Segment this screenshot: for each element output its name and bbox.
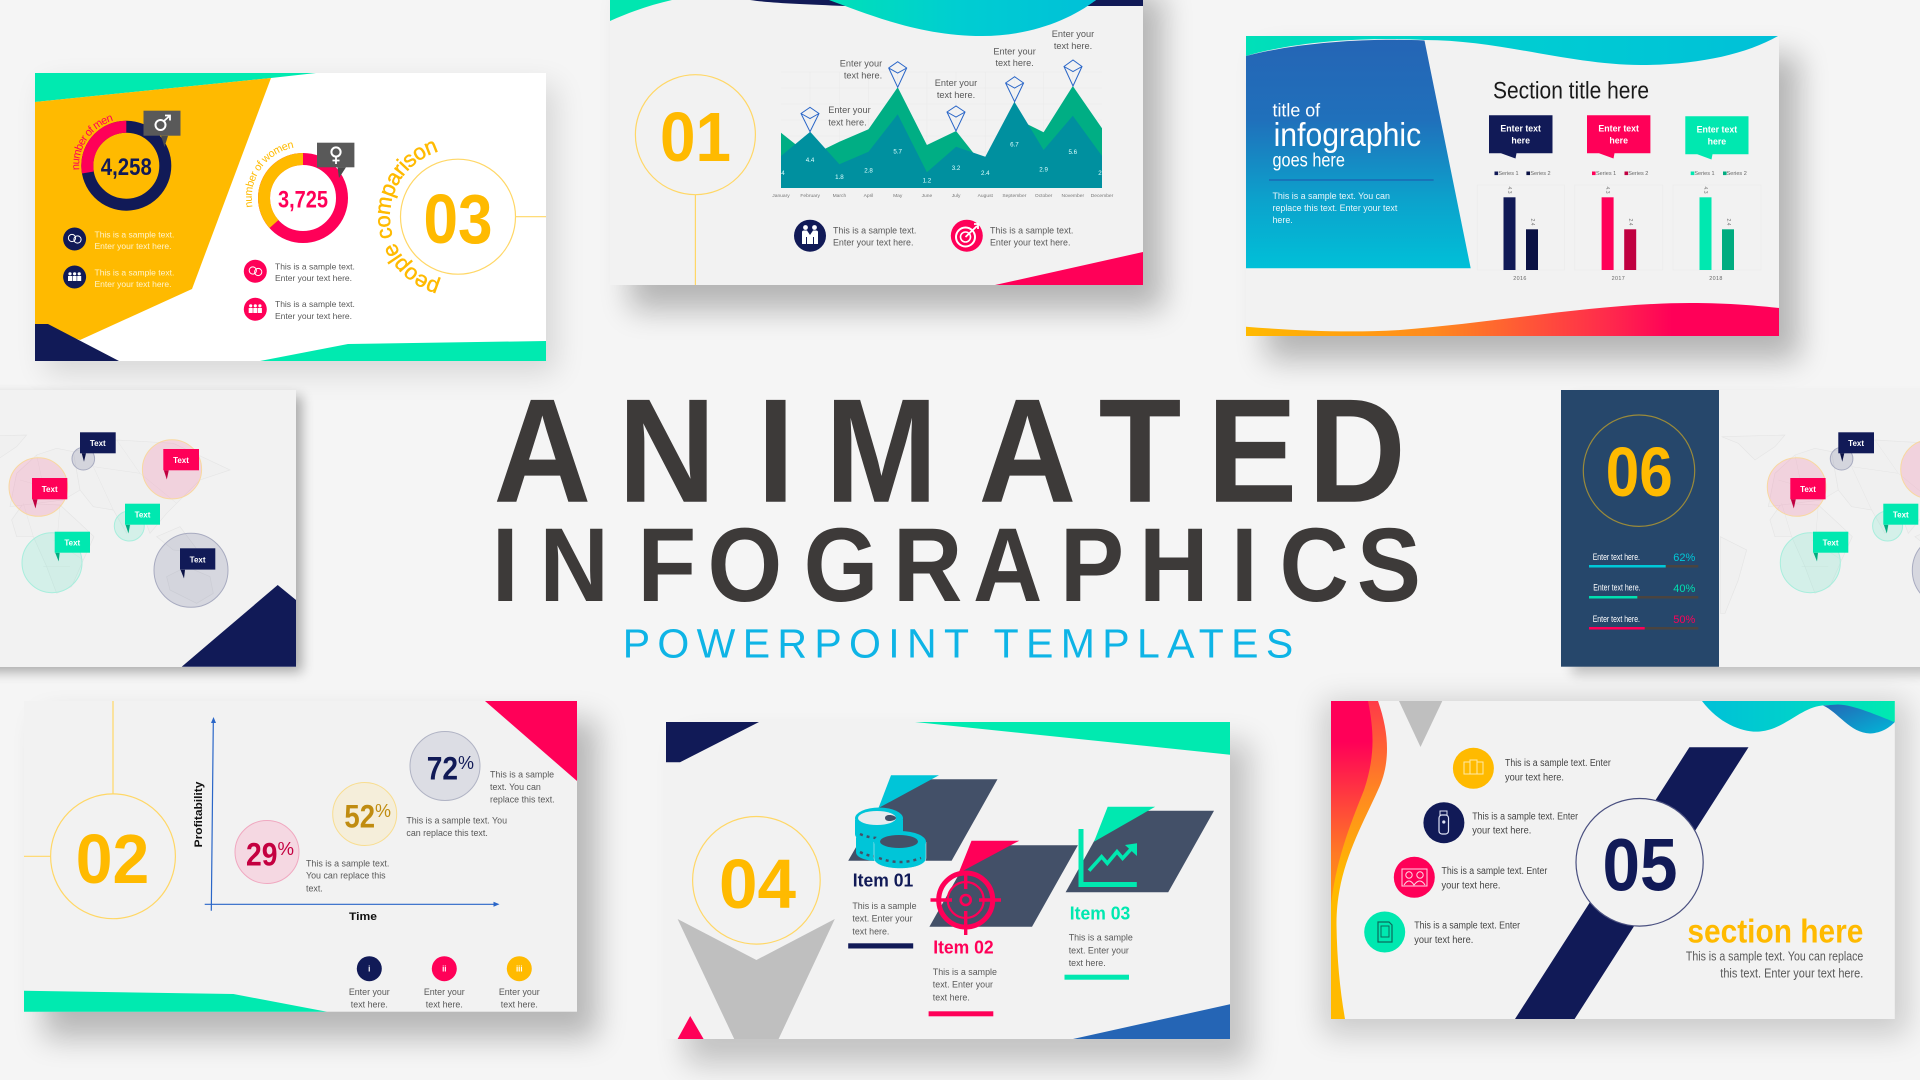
chart: 2016 bars: Series 2: [1530, 171, 1551, 177]
step iii: Enter your: [499, 987, 540, 997]
text: item 02: text. Enter your: [933, 980, 993, 990]
chart: monthly area chart: September: [1002, 193, 1027, 199]
data bubble: 52%: 52: [344, 798, 375, 834]
number badge: 05: [1576, 798, 1703, 926]
icon: pink circle couple: [244, 260, 267, 283]
chart: 2017 bars: Series 2: [1628, 171, 1648, 177]
callout: navy series: here: [1511, 136, 1530, 146]
text: women note one: This is a sample text.: [275, 262, 355, 272]
map bubbles and labels copy: Text: [1893, 510, 1909, 520]
chart: monthly area chart: 1.2: [923, 178, 932, 184]
map bubbles and labels copy: Text: [1800, 485, 1816, 494]
progress row: 40%: [1589, 583, 1698, 598]
text: infographic description: replace this text. Enter your text: [1272, 203, 1398, 213]
chart axes: Profitability: [193, 781, 205, 847]
icon row: green: [1364, 912, 1521, 952]
text: target note: This is a sample text.: [990, 226, 1073, 236]
callout: lower navy: [180, 548, 215, 578]
number badge: 01: 01: [660, 98, 731, 176]
text: 52% note: This is a sample text. You: [406, 815, 507, 825]
text: item 01: text here.: [852, 926, 889, 936]
icon row: pink: your text here.: [1442, 880, 1500, 891]
shape: item 01 parallelogram: [848, 775, 998, 861]
icon row: yellow: your text here.: [1505, 772, 1564, 783]
progress row: 50%: Enter text here.: [1593, 614, 1640, 624]
text: chart annotations: Enter your: [828, 105, 871, 115]
icon: handshake: [794, 220, 826, 252]
callout: navy series: Enter text: [1500, 124, 1541, 134]
text: infographic description: here.: [1272, 215, 1293, 225]
icon row: pink: This is a sample text. Enter: [1442, 866, 1548, 877]
title line: animated: ANIMATED: [493, 369, 1406, 534]
text: item 01: [848, 871, 917, 948]
text: 52% note: can replace this text.: [406, 828, 488, 838]
callout: lower green: [55, 532, 90, 562]
chart axes: Time: [349, 911, 377, 923]
chart: 2017 bars: 2.4: [1627, 219, 1633, 226]
chart: 2017 bars: 4.3: [1604, 187, 1610, 194]
panel: 01 area chart: [610, 0, 1163, 310]
number badge: 03: [400, 159, 546, 274]
text: chart annotations: Enter your: [935, 78, 977, 88]
title line: infographics: INFOGRAPHICS: [492, 507, 1421, 624]
step i: i: [368, 964, 370, 974]
icon: blue circle couple: [63, 228, 86, 250]
chart: monthly area chart: July: [952, 193, 961, 199]
chart: monthly area chart: 5.6: [1068, 149, 1078, 156]
chart: monthly area chart: 5.7: [893, 148, 903, 156]
icon row: yellow: [1453, 748, 1611, 789]
map bubbles and labels: [9, 432, 228, 607]
text: item 03: Item 03: [1070, 903, 1130, 923]
text: chart annotations: text here.: [828, 118, 867, 128]
number badge: 02: [24, 701, 175, 919]
callout: green series: Enter text: [1697, 125, 1737, 135]
panel: 03 people comparison: [35, 73, 564, 382]
callout: top navy: [80, 432, 116, 462]
data bubble: 29%: 29: [246, 837, 278, 873]
text: chart annotations: text here.: [1054, 41, 1092, 51]
icon row: yellow: This is a sample text. Enter: [1505, 758, 1611, 769]
chart: men donut: 4,258: [101, 154, 152, 181]
text: men note two: This is a sample text.: [94, 268, 174, 278]
text: 29% note: text.: [306, 883, 323, 893]
text: 72% note: text. You can: [490, 782, 541, 792]
callout: pink series: here: [1609, 136, 1628, 146]
data bubble: 52%: %: [375, 801, 391, 821]
chart: monthly area chart: August: [978, 193, 994, 199]
callout: navy series: [1489, 115, 1552, 158]
panel: section title bar charts: [1246, 36, 1799, 360]
chart: 2016 bars: 2.4: [1529, 219, 1535, 226]
text: section description: [1686, 949, 1863, 981]
panel: 04 items: [666, 722, 1250, 1064]
chart: monthly area chart: May: [893, 193, 903, 199]
text: chart annotations: Enter your: [993, 46, 1036, 56]
map bubbles and labels copy: [1767, 432, 1920, 607]
chart: men donut: number of men: [73, 116, 113, 170]
chart: monthly area chart: 1.8: [835, 174, 844, 181]
chart: men donut: [73, 116, 172, 211]
progress row: 50%: [1589, 614, 1698, 630]
chart: 2017 bars: 2017: [1612, 276, 1625, 282]
chart: monthly area chart: June: [922, 193, 932, 199]
text: infographic description: This is a sample text. You can: [1272, 191, 1390, 201]
data bubble: 29%: [235, 820, 299, 884]
text: chart annotations: text here.: [937, 90, 975, 100]
chart: 2018 bars: Series 2: [1727, 171, 1747, 177]
progress row: 40%: 40%: [1673, 583, 1696, 595]
text: item 03: text. Enter your: [1069, 945, 1129, 955]
text: item 03: text here.: [1069, 958, 1106, 968]
callout: pink series: [1587, 115, 1650, 158]
number badge: 04: [693, 816, 820, 944]
callout: lower green: Text: [64, 538, 81, 548]
map: world outline: [0, 435, 230, 613]
text: item 01: text. Enter your: [852, 914, 913, 924]
chart: women donut: number of women: [245, 142, 294, 208]
chart: monthly area chart: November: [1062, 193, 1084, 199]
text: chart annotations: Enter your: [1052, 29, 1094, 39]
text: 29% note: You can replace this: [306, 871, 386, 881]
icon: target: [951, 220, 983, 252]
text: chart annotations: text here.: [844, 70, 882, 80]
chart: monthly area chart: December: [1091, 193, 1114, 199]
number badge: 04: 04: [719, 845, 796, 923]
icon: female symbol callout: [317, 143, 354, 178]
step iii: [499, 956, 540, 1009]
data bubble: 29%: %: [278, 839, 294, 859]
icon row: navy: This is a sample text. Enter: [1472, 811, 1579, 822]
panel: world map left: [0, 390, 302, 672]
text: chart annotations: [828, 29, 1094, 128]
chart: monthly area chart: 6.7: [1010, 142, 1019, 148]
icon: crosshair target: [930, 872, 1001, 935]
chart: monthly area chart: March: [833, 193, 846, 199]
step ii: text here.: [426, 999, 463, 1009]
heading: section title: Section title here: [1493, 77, 1649, 104]
callout: left pink: [32, 478, 67, 508]
panel: 05 section: [1323, 701, 1907, 1035]
chart: 2018 bars: 4.3: [1702, 187, 1708, 194]
progress row: 40%: Enter text here.: [1593, 583, 1641, 593]
icon row: navy: [1423, 802, 1579, 843]
data bubble: 72%: 72: [427, 750, 458, 786]
text: item 02: [929, 937, 997, 1016]
step ii: Enter your: [424, 987, 465, 997]
chart: monthly area chart: January: [772, 193, 790, 199]
chart: monthly area chart: 2: [1098, 170, 1102, 177]
chart: monthly area chart: April: [864, 193, 873, 199]
step i: [349, 956, 390, 1009]
map: world outline copy: [1720, 435, 1920, 613]
curved title: people comparison: people comparison: [378, 141, 441, 294]
panel: 06 progress and map: [1561, 390, 1920, 674]
chart: 2018 bars: [1673, 171, 1761, 282]
text: item 01: This is a sample: [852, 901, 917, 911]
text: 72% note: replace this text.: [490, 794, 555, 804]
progress row: 62%: [1589, 552, 1698, 568]
map bubbles and labels copy: Text: [1823, 538, 1839, 548]
text: handshake note: Enter your text here.: [833, 238, 913, 248]
text: handshake note: This is a sample text.: [833, 226, 916, 236]
callout: pink series: Enter text: [1598, 124, 1639, 134]
chart: 2016 bars: 4.3: [1506, 187, 1512, 194]
step i: text here.: [351, 999, 388, 1009]
callout: right pink: [163, 449, 199, 480]
data bubble: 52%: [333, 782, 397, 846]
icon: pink circle group: [244, 298, 267, 321]
text: infographic title: infographic: [1274, 116, 1421, 153]
text: target note: Enter your text here.: [990, 238, 1070, 248]
chart: women donut: [245, 142, 348, 243]
text: men note one: Enter your text here.: [94, 241, 172, 251]
chart: monthly area chart: [772, 86, 1114, 198]
callout: green series: here: [1708, 137, 1726, 147]
chart: 2018 bars: 2018: [1709, 276, 1723, 282]
text: chart annotations: text here.: [995, 58, 1034, 68]
chart: monthly area chart: 2.4: [981, 170, 990, 177]
progress row: 50%: 50%: [1673, 614, 1696, 626]
icon: blue circle group: [63, 266, 86, 288]
icon: coins: [855, 808, 926, 868]
text: women note two: Enter your text here.: [275, 311, 352, 321]
chart: 2016 bars: 2016: [1513, 276, 1527, 282]
main title: [492, 369, 1421, 666]
text: 72% note: This is a sample: [490, 769, 554, 779]
chart axes: [193, 717, 500, 923]
chart: monthly area chart: 2.9: [1039, 166, 1048, 174]
step iii: text here.: [501, 999, 538, 1009]
text: men note one: This is a sample text.: [94, 230, 174, 240]
step iii: iii: [516, 964, 523, 974]
step i: Enter your: [349, 987, 390, 997]
text: infographic title: title of: [1272, 101, 1321, 121]
shape: item 03 parallelogram: [1066, 807, 1214, 892]
chart: women donut: 3,725: [278, 186, 328, 214]
text: item 01: Item 01: [853, 871, 913, 891]
callout: center green: [125, 504, 160, 534]
callout: lower navy: Text: [190, 555, 206, 564]
text: infographic title: [1272, 101, 1421, 172]
icon: male symbol callout: [144, 111, 180, 147]
sidebar: navy 06: 06: [1606, 433, 1673, 511]
callout: center green: Text: [135, 510, 151, 520]
chart: 2018 bars: Series 1: [1694, 171, 1715, 177]
chart: monthly area chart: 3.2: [952, 165, 961, 172]
text: 29% note: This is a sample text.: [306, 858, 389, 868]
chart: 2016 bars: Series 1: [1498, 171, 1519, 177]
map bubbles and labels copy: Text: [1848, 439, 1864, 448]
chart: monthly area chart: 2.8: [864, 168, 873, 174]
icon row: pink: [1394, 857, 1548, 898]
step ii: ii: [442, 964, 447, 974]
callout: right pink: Text: [173, 456, 189, 465]
text: chart annotations: Enter your: [840, 58, 882, 68]
text: men note two: Enter your text here.: [94, 279, 172, 289]
text: infographic title: goes here: [1272, 151, 1345, 172]
icon row: navy: your text here.: [1472, 826, 1531, 837]
text: item 02: Item 02: [933, 937, 994, 957]
data bubble: 72%: %: [458, 753, 474, 773]
chart: 2017 bars: [1575, 171, 1663, 282]
chart: monthly area chart: 4: [781, 170, 785, 177]
callout: green series: [1685, 116, 1748, 160]
progress row: 62%: Enter text here.: [1593, 552, 1640, 562]
callout: left pink: Text: [42, 485, 58, 494]
shape: item 02 parallelogram: [929, 841, 1078, 927]
number badge: 03: 03: [424, 180, 492, 258]
data bubble: 72%: [410, 732, 480, 800]
progress row: 62%: 62%: [1673, 552, 1696, 564]
text: section description: this text. Enter your text here.: [1720, 966, 1863, 981]
text: women note two: This is a sample text.: [275, 299, 355, 309]
number badge: 02: 02: [76, 820, 149, 898]
subtitle: POWERPOINT TEMPLATES: [623, 620, 1293, 666]
text: section description: This is a sample text. You can replace: [1686, 949, 1863, 964]
icon: growth chart: [1081, 829, 1137, 884]
text: women note one: Enter your text here.: [275, 273, 352, 283]
chart: 2018 bars: 2.4: [1725, 219, 1731, 226]
panel: 02 profitability chart: [24, 701, 597, 1038]
text: item 03: [1064, 903, 1133, 980]
text: item 03: This is a sample: [1069, 933, 1133, 943]
chart: monthly area chart: October: [1035, 193, 1053, 199]
number badge: 01: [635, 75, 755, 285]
icon row: green: This is a sample text. Enter: [1414, 921, 1521, 932]
number badge: 05: 05: [1602, 824, 1678, 907]
chart: monthly area chart: 4.4: [806, 157, 815, 164]
text: item 02: text here.: [933, 992, 970, 1002]
text: item 02: This is a sample: [933, 967, 997, 977]
chart: 2017 bars: Series 1: [1596, 171, 1616, 177]
sidebar: navy 06: [1561, 390, 1719, 667]
chart: 2016 bars: [1477, 171, 1564, 282]
icon row: green: your text here.: [1414, 935, 1473, 946]
heading: section here: section here: [1687, 912, 1863, 949]
markers: diamond pins: [801, 60, 1082, 132]
step ii: [424, 956, 465, 1009]
chart: monthly area chart: February: [800, 193, 821, 199]
callout: top navy: Text: [90, 439, 106, 448]
